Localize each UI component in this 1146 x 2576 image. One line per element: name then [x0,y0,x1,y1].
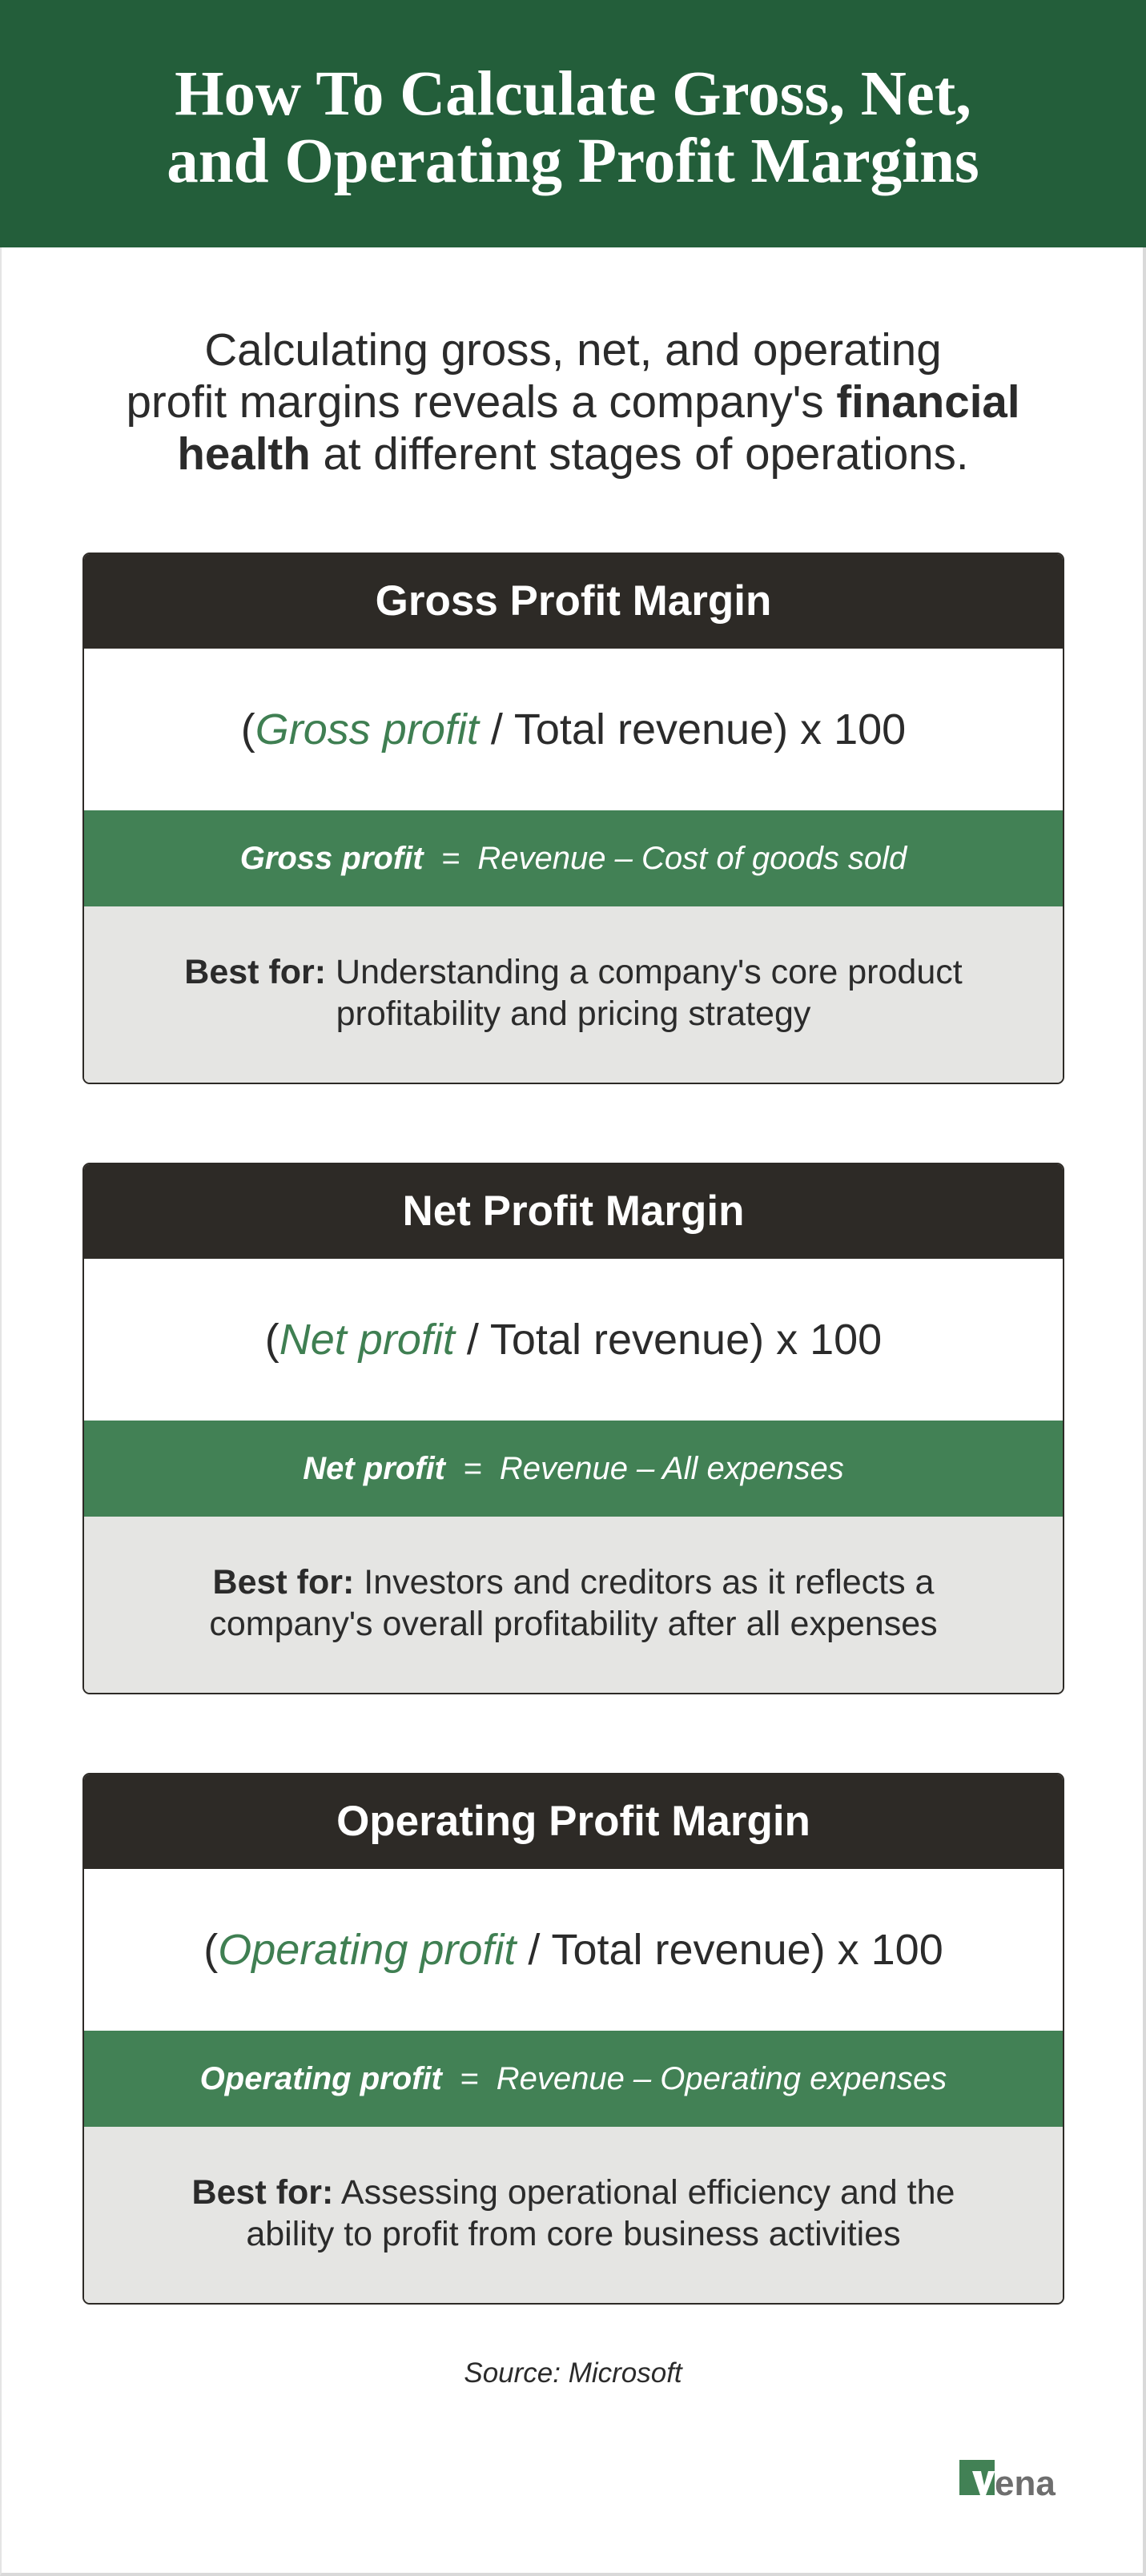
title: and Operating Profit Margins [167,127,979,196]
best for: gross: Best for: Understanding a company's core product [184,953,963,991]
heading: gross [84,554,1063,649]
formula: operating: (Operating profit / Total revenue) x 100 [203,1926,943,1974]
formula: gross: (Gross profit / Total revenue) x 100 [241,705,906,754]
intro text [126,324,1020,479]
intro text: profit margins reveals a company's financial [126,376,1020,427]
definition: net: Net profit = Revenue – All expenses [303,1451,844,1486]
definition: gross [84,810,1063,906]
best for: operating: ability to profit from core business activities [246,2215,901,2253]
formula: net: (Net profit / Total revenue) x 100 [265,1316,882,1364]
panel: operating profit margin [82,1773,1064,2305]
panel: gross profit margin [82,553,1064,1084]
definition: net [84,1421,1063,1517]
best for: net: company's overall profitability after all expenses [209,1605,938,1643]
intro text: Calculating gross, net, and operating [204,324,942,375]
best for: gross: profitability and pricing strategy [336,995,810,1033]
best for: net: Best for: Investors and creditors as it reflects a [213,1563,934,1601]
heading: operating [84,1774,1063,1869]
best for: operating: Best for: Assessing operational efficiency and the [192,2173,955,2212]
intro text: health at different stages of operations. [177,428,969,479]
heading: operating: Operating Profit Margin [336,1798,810,1845]
source: Source: Microsoft [464,2357,682,2389]
title [0,0,1146,247]
best for: gross [84,906,1063,1084]
logo: vena [959,2460,1056,2497]
best for: net [84,1517,1063,1694]
panel: net profit margin [82,1163,1064,1694]
best for: operating [84,2127,1063,2305]
heading: net [84,1164,1063,1259]
heading: gross: Gross Profit Margin [376,577,771,625]
heading: net: Net Profit Margin [403,1188,744,1235]
definition: gross: Gross profit = Revenue – Cost of goods sold [240,841,907,876]
title: How To Calculate Gross, Net, [175,59,971,129]
definition: operating: Operating profit = Revenue – Operating expenses [200,2061,947,2096]
definition: operating [84,2031,1063,2127]
